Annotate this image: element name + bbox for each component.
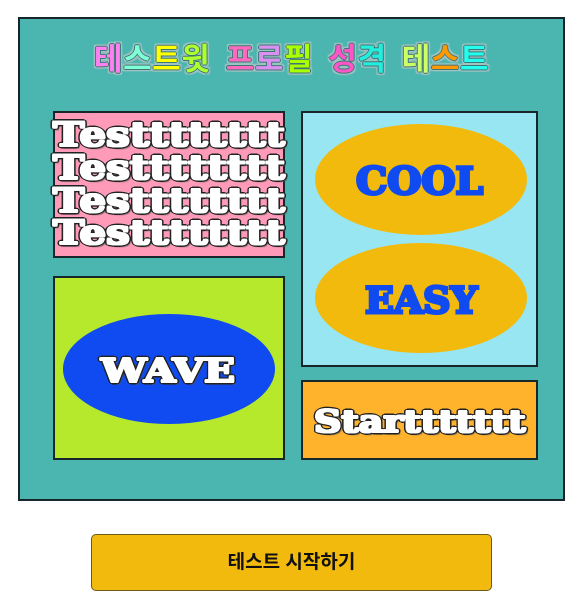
- label: WAVE: WAVE: [101, 351, 235, 390]
- ellipse: WAVE: [63, 314, 275, 424]
- ellipse: EASY: [315, 243, 527, 353]
- label: COOL: COOL: [356, 159, 483, 203]
- text: Testtttttttt lines: Testttttttt: [53, 115, 285, 155]
- panel: lime: [53, 276, 285, 460]
- text: Testtttttttt lines: Testttttttt: [53, 148, 285, 188]
- text: Testtttttttt lines: Testttttttt: [53, 213, 285, 253]
- main panel: [18, 17, 565, 501]
- panel: pink test text: [53, 111, 285, 258]
- title: 테스트윗 프로필 성격 테스트: [94, 42, 489, 77]
- text: Testtttttttt lines: Testttttttt: [53, 181, 285, 221]
- ellipse: COOL: [315, 124, 527, 235]
- label: EASY: EASY: [365, 280, 477, 322]
- text: Testtttttttt lines: [50, 115, 288, 253]
- start button: [91, 534, 492, 591]
- panel: cyan with ellipses: [301, 111, 538, 367]
- panel: orange start: [301, 380, 538, 460]
- label: Starttttttt: Starttttttt: [314, 404, 526, 440]
- start button: 테스트 시작하기: [228, 552, 355, 573]
